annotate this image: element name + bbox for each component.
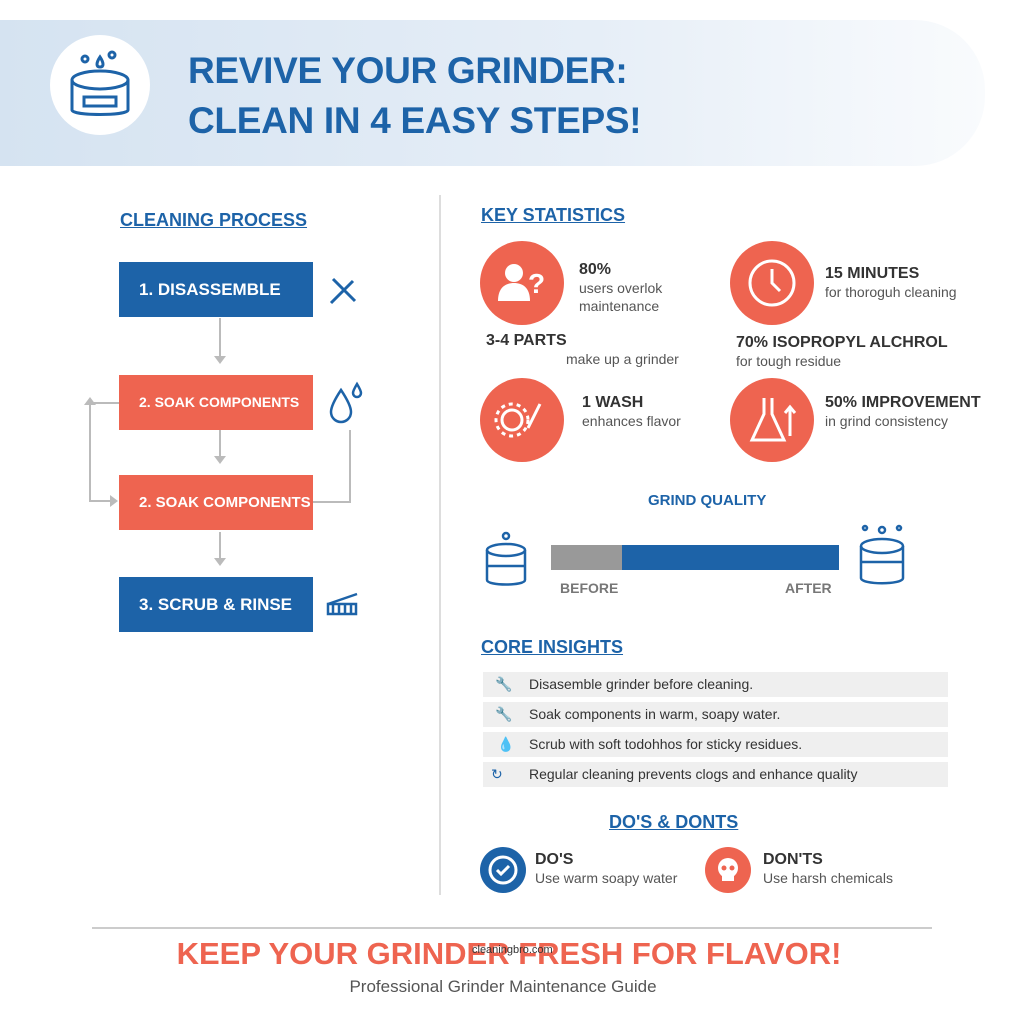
dont: DON'TS: [763, 851, 823, 868]
step 2: 2. SOAK COMPONENTS: [139, 394, 299, 410]
do: [480, 847, 678, 893]
stat 50%: 50% IMPROVEMENT: [825, 394, 981, 411]
icon: can after: [860, 524, 904, 584]
stat 15 minutes: [730, 241, 957, 325]
title: [188, 50, 641, 141]
insights list: Soak components in warm, soapy water.: [529, 706, 780, 722]
stat 80%: ?: [528, 268, 545, 299]
stat 70%: [736, 334, 948, 369]
step 2b: [119, 475, 313, 530]
step 2: [119, 375, 313, 430]
stat 50%: [730, 378, 981, 462]
dont: [705, 847, 893, 893]
do: DO'S: [535, 851, 573, 868]
stat 80%: maintenance: [579, 298, 659, 314]
icon: tools: [330, 278, 356, 304]
header band: [0, 20, 985, 166]
step 1: 1. DISASSEMBLE: [139, 280, 281, 299]
stat 70%: 70% ISOPROPYL ALCHROL: [736, 334, 948, 351]
insights list: Regular cleaning prevents clogs and enhance quality: [529, 766, 857, 782]
icon: drops: [330, 382, 362, 424]
step 1: [119, 262, 313, 317]
insights list: 🔧: [495, 676, 512, 692]
heading: core insights: CORE INSIGHTS: [481, 637, 623, 657]
insights list: 🔧: [495, 706, 512, 722]
bar: [551, 545, 839, 570]
heading: cleaning process: CLEANING PROCESS: [120, 210, 307, 230]
stat 15 minutes: for thoroguh cleaning: [825, 284, 957, 300]
title: CLEAN IN 4 EASY STEPS!: [188, 100, 641, 141]
step 2b: 2. SOAK COMPONENTS: [139, 494, 311, 511]
stat 50%: in grind consistency: [825, 413, 948, 429]
stat 3-4 parts: [486, 332, 679, 367]
insights list: Scrub with soft todohhos for sticky residues.: [529, 736, 802, 752]
stat 80%: [480, 241, 662, 325]
title: REVIVE YOUR GRINDER:: [188, 50, 627, 91]
stat 1 wash: 1 WASH: [582, 394, 643, 411]
text: cleaningbro.com: [472, 944, 553, 956]
do: Use warm soapy water: [535, 870, 677, 886]
footer line: [92, 927, 932, 929]
stat 3-4 parts: 3-4 PARTS: [486, 332, 567, 349]
dont: Use harsh chemicals: [763, 870, 893, 886]
icon: brush: [326, 592, 358, 616]
stat 3-4 parts: make up a grinder: [566, 351, 679, 367]
insights list: ↻: [491, 766, 503, 782]
divider: [439, 195, 441, 895]
insights list: 💧: [497, 736, 514, 752]
stat 1 wash: [480, 378, 681, 462]
insights list: [483, 672, 948, 787]
step 3: 3. SCRUB & RINSE: [139, 595, 292, 614]
heading: key statistics: KEY STATISTICS: [481, 205, 625, 225]
footer subtitle: Professional Grinder Maintenance Guide: [349, 977, 657, 996]
stat 80%: 80%: [579, 261, 611, 278]
stat 15 minutes: 15 MINUTES: [825, 265, 919, 282]
icon: grinder badge: [50, 35, 150, 135]
insights list: Disasemble grinder before cleaning.: [529, 676, 753, 692]
stat 70%: for tough residue: [736, 353, 841, 369]
heading: dos and donts: DO'S & DONTS: [609, 812, 738, 832]
footer headline: KEEP YOUR GRINDER FRESH FOR FLAVOR!: [177, 936, 841, 971]
flow diagram: [84, 262, 362, 632]
grind quality chart: [486, 492, 904, 596]
icon: can before: [486, 532, 526, 586]
chart title: GRIND QUALITY: [648, 492, 766, 509]
stat 80%: users overlok: [579, 280, 662, 296]
grind quality chart: BEFORE: [560, 580, 618, 596]
stat 1 wash: enhances flavor: [582, 413, 681, 429]
grind quality chart: AFTER: [785, 580, 832, 596]
step 3: [119, 577, 313, 632]
